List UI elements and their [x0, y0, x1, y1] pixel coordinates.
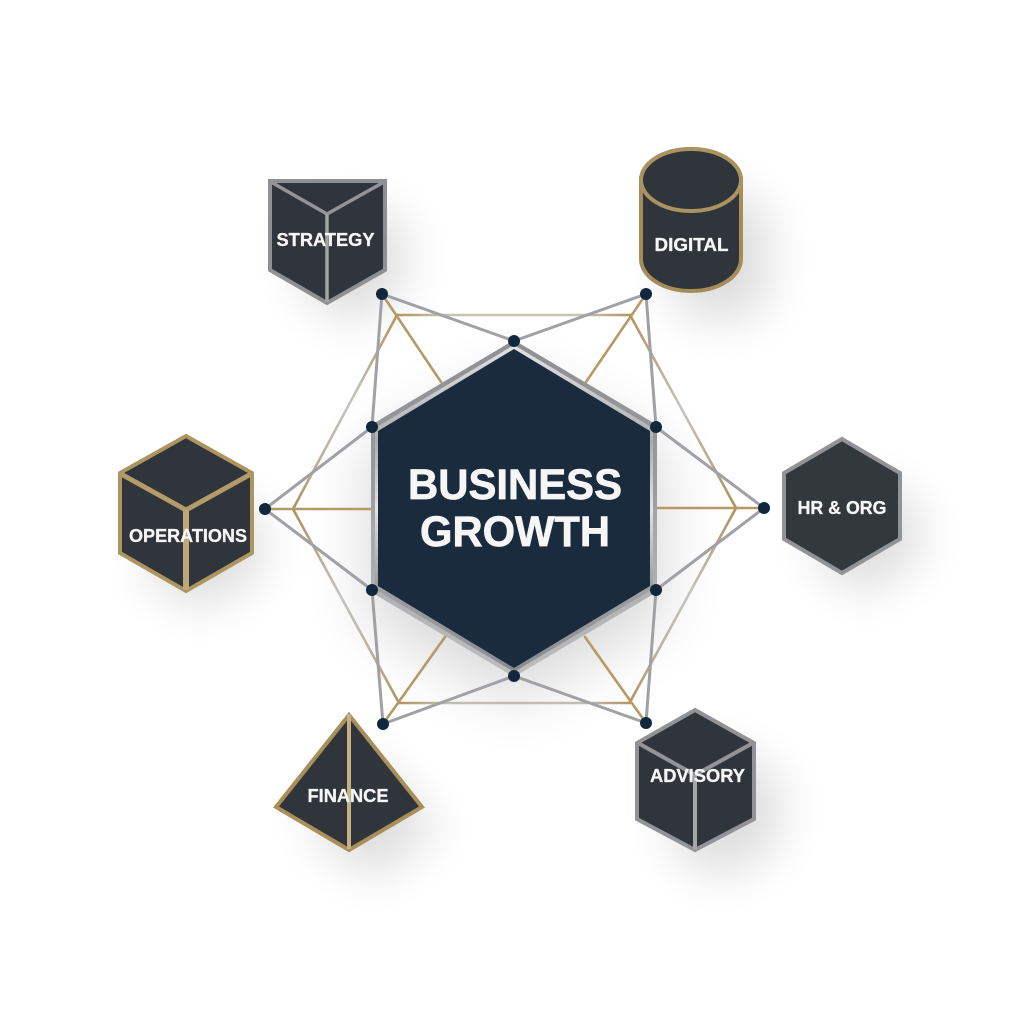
- outer star ring: [293, 315, 736, 703]
- title: GROWTH: [420, 508, 610, 556]
- icon: operations cube: OPERATIONS: [129, 526, 247, 546]
- icon: hr and org hexagon: [784, 439, 900, 573]
- network nodes: [259, 288, 770, 730]
- grey spokes: [265, 294, 764, 724]
- connector network: [265, 294, 764, 724]
- icon: operations cube: [120, 436, 252, 591]
- icon: digital cylinder: [641, 149, 741, 291]
- icon: advisory cube: ADVISORY: [650, 766, 745, 786]
- icon: finance pyramid: FINANCE: [308, 786, 388, 806]
- title: [408, 461, 622, 556]
- gold spokes: [265, 294, 764, 724]
- icon: strategy shield: [270, 181, 385, 303]
- central hexagon: business growth: [371, 340, 657, 677]
- icon: finance pyramid: [276, 714, 422, 850]
- icon: digital cylinder: DIGITAL: [654, 235, 729, 255]
- icon: strategy shield: STRATEGY: [276, 230, 374, 250]
- icon: hr and org hexagon: HR & ORG: [798, 498, 886, 518]
- icon: advisory cube: [637, 710, 754, 850]
- title: BUSINESS: [408, 461, 622, 509]
